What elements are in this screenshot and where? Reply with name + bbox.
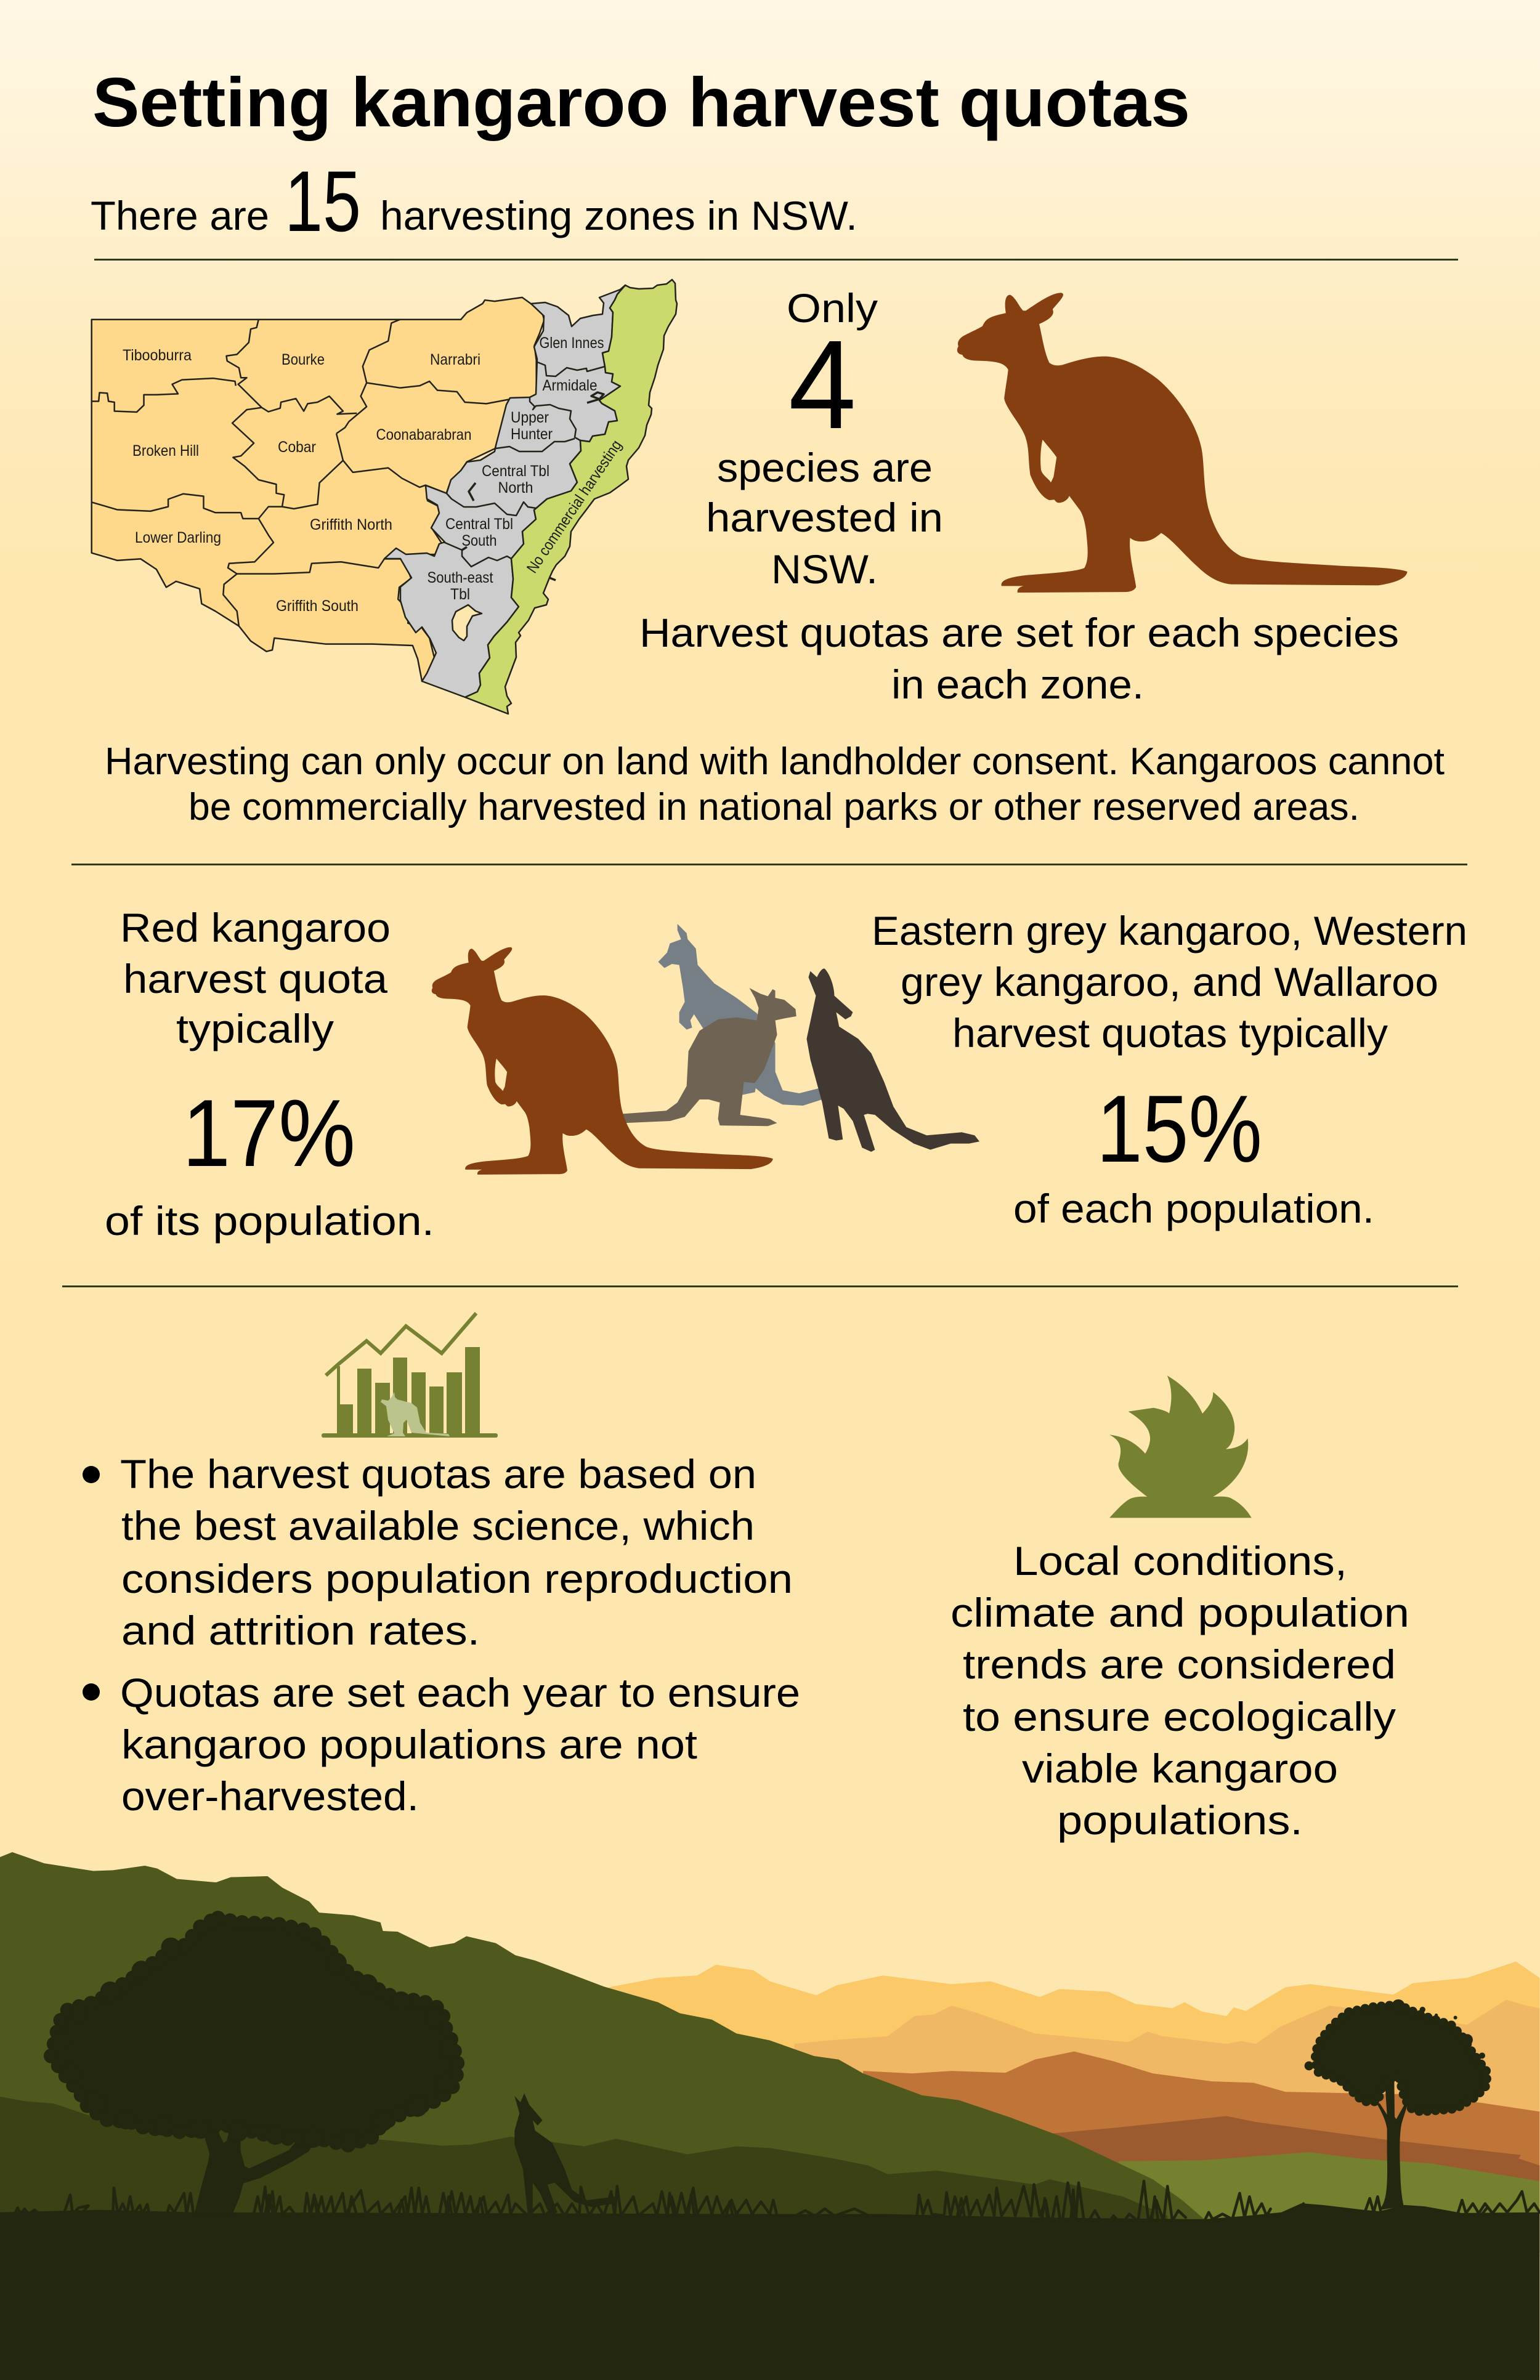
zone labels: Upper <box>511 409 549 426</box>
text: local conditions: viable kangaroo <box>1022 1746 1338 1791</box>
text: science-based quotas bullets: kangaroo populations are not <box>121 1722 697 1767</box>
eastern grey kangaroo <box>623 988 796 1126</box>
zone labels: Tbl <box>450 586 470 603</box>
panel: grey kangaroos and wallaroo quota: grey kangaroo, and Wallaroo <box>901 959 1438 1005</box>
icon: red kangaroo <box>432 947 773 1175</box>
panel: red kangaroo quota: of its population. <box>105 1198 434 1244</box>
icon: bar chart with trend line <box>322 1313 498 1438</box>
icon: grey kangaroos group <box>623 924 979 1152</box>
left tree <box>51 1918 458 2215</box>
right tree <box>1305 1999 1486 2210</box>
zone labels: Griffith South <box>276 597 359 615</box>
rust hill <box>1052 2116 1539 2252</box>
zone labels <box>123 334 625 615</box>
text: quotas per species per zone <box>639 610 1399 707</box>
zone labels: Hunter <box>511 426 553 443</box>
text: local conditions: climate and population <box>950 1590 1409 1635</box>
panel: grey kangaroos and wallaroo quota: of each population. <box>1013 1186 1374 1231</box>
orange mountains <box>863 2052 1539 2252</box>
light olive field <box>1119 2152 1539 2252</box>
species text: only 4 species: Only <box>787 285 878 331</box>
species text: only 4 species: harvested in <box>706 495 943 540</box>
text: landholder consent: Harvesting can only occur on land with landholder consent. Kangaroos cannot <box>105 740 1445 783</box>
zone labels: Broken Hill <box>132 442 199 459</box>
zone labels: Central Tbl <box>482 463 549 480</box>
zone labels: Griffith North <box>310 516 392 533</box>
panel: red kangaroo quota <box>105 905 434 1244</box>
species text: only 4 species <box>706 285 943 592</box>
water bodies <box>462 392 604 580</box>
panel: red kangaroo quota: harvest quota <box>123 956 387 1002</box>
zone labels: Coonabarabran <box>376 426 472 443</box>
species text: only 4 species: species are <box>717 445 933 490</box>
zone labels: North <box>498 479 533 496</box>
light orange mountains <box>795 2000 1539 2252</box>
western grey kangaroo <box>658 924 822 1106</box>
subtitle: 15 harvesting zones: There are <box>91 193 269 238</box>
subtitle: 15 harvesting zones <box>91 153 857 249</box>
panel: red kangaroo quota: typically <box>176 1006 334 1051</box>
text: science-based quotas bullets: Quotas are set each year to ensure <box>120 1670 800 1715</box>
text: science-based quotas bullets: and attrition rates. <box>121 1608 480 1653</box>
text: science-based quotas bullets: considers population reproduction <box>121 1556 793 1601</box>
zone labels: South-east <box>428 569 493 586</box>
panel: grey kangaroos and wallaroo quota <box>872 908 1467 1231</box>
text: local conditions: populations. <box>1057 1797 1303 1843</box>
western zone borders <box>92 320 510 626</box>
panel: red kangaroo quota: 17% <box>182 1080 355 1186</box>
text: science-based quotas bullets: The harvest quotas are based on <box>120 1451 756 1497</box>
lake <box>452 605 482 641</box>
panel: grey kangaroos and wallaroo quota: 15% <box>1096 1075 1262 1182</box>
text: local conditions: to ensure ecologically <box>963 1694 1396 1739</box>
text: local conditions <box>950 1538 1409 1843</box>
zone labels: South <box>462 532 496 549</box>
text: landholder consent: be commercially harvested in national parks or other reserved areas. <box>188 786 1360 828</box>
text: local conditions: trends are considered <box>963 1641 1396 1687</box>
harvest zones in orange <box>92 298 544 681</box>
text: quotas per species per zone: in each zone. <box>891 662 1144 707</box>
zone labels: Tibooburra <box>123 347 192 364</box>
grass <box>15 2181 1539 2228</box>
text: science-based quotas bullets <box>83 1451 800 1819</box>
far yellow mountains <box>609 1962 1539 2252</box>
foreground ground <box>0 2203 1539 2380</box>
landscape scene <box>0 1852 1539 2380</box>
species text: only 4 species: 4 <box>788 314 856 455</box>
zone labels: No commercial harvesting <box>524 437 625 577</box>
title: Setting kangaroo harvest quotas <box>92 63 1190 141</box>
text: science-based quotas bullets: over-harvested. <box>121 1773 419 1819</box>
zone labels: Central Tbl <box>445 516 513 533</box>
zone labels: Bourke <box>282 351 325 368</box>
tablelands zones in grey <box>384 285 625 697</box>
panel: grey kangaroos and wallaroo quota: Eastern grey kangaroo, Western <box>872 908 1467 953</box>
species text: only 4 species: NSW. <box>771 546 878 592</box>
icon: flame <box>1109 1375 1252 1518</box>
olive hill <box>0 1852 1204 2252</box>
subtitle: 15 harvesting zones: 15 <box>285 153 361 249</box>
map of NSW harvesting zones <box>92 280 677 714</box>
dark olive hill <box>0 2097 1167 2252</box>
zone labels: Cobar <box>278 439 316 456</box>
zone labels: Glen Innes <box>540 334 604 352</box>
zone labels: Armidale <box>542 377 598 394</box>
panel: red kangaroo quota: Red kangaroo <box>120 905 391 950</box>
text: local conditions: Local conditions, <box>1013 1538 1347 1584</box>
small kangaroo in chart <box>381 1392 450 1436</box>
zone labels: Lower Darling <box>135 529 221 546</box>
subtitle: 15 harvesting zones: harvesting zones in NSW. <box>380 193 857 238</box>
wallaroo <box>806 968 979 1152</box>
zone labels: Narrabri <box>430 351 480 368</box>
panel: grey kangaroos and wallaroo quota: harvest quotas typically <box>952 1010 1388 1056</box>
text: science-based quotas bullets: the best available science, which <box>121 1503 755 1548</box>
icon: large red kangaroo <box>957 293 1408 593</box>
no commercial harvesting strip <box>465 280 677 714</box>
text: quotas per species per zone: Harvest quotas are set for each species <box>639 610 1399 655</box>
text: landholder consent <box>105 740 1445 828</box>
tablelands zone borders <box>444 362 605 567</box>
kangaroo silhouette <box>514 2093 616 2216</box>
